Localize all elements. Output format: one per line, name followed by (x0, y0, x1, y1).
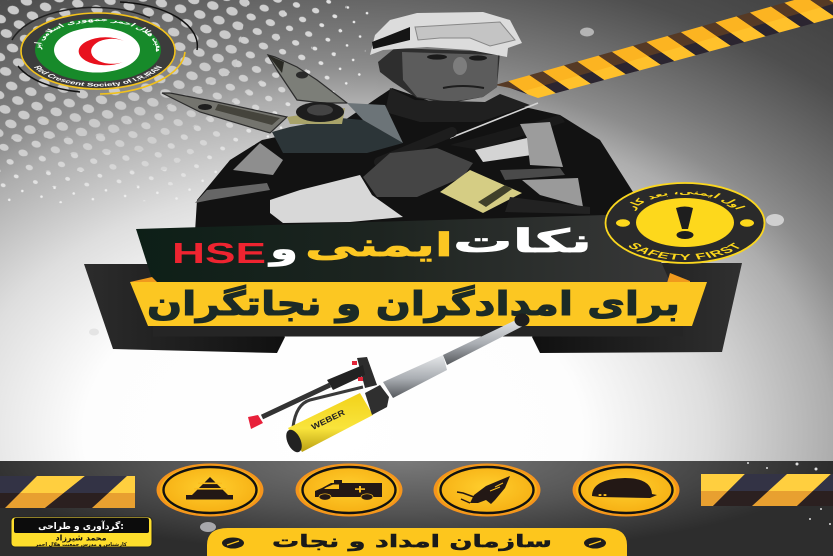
hazard block left (0, 476, 135, 508)
title line one: HSE (172, 238, 266, 270)
rescuer figure with hydraulic cutter (162, 12, 640, 232)
icon: hard hat (572, 464, 680, 516)
title line one (172, 222, 592, 270)
footer title: سازمان امداد و نجات (272, 532, 552, 552)
ram label: WEBER (310, 408, 346, 432)
banner left ribbon tail (84, 264, 285, 353)
banner right ribbon tail (532, 263, 742, 353)
yellow folds (130, 277, 158, 283)
handle and glove (379, 132, 452, 162)
grey dot above footer tab (200, 522, 216, 532)
white cuff (270, 175, 403, 223)
title line one: و (267, 232, 298, 267)
footer bullet left (222, 538, 244, 548)
face (378, 48, 500, 103)
icon: ambulance (296, 464, 402, 516)
decorative grey dots (89, 28, 784, 336)
halftone dot pattern (0, 0, 375, 205)
icon: traffic cone (156, 464, 264, 516)
banner top box (136, 214, 670, 282)
cutter body (272, 118, 403, 153)
safety first badge (604, 182, 766, 264)
footer tab (207, 528, 627, 556)
logo ring text (34, 19, 162, 87)
badge ring text: SAFETY FIRST (628, 242, 740, 260)
cutter lower blade (162, 93, 287, 133)
footer bullet right (584, 538, 606, 548)
collar (385, 88, 530, 122)
helmet (370, 12, 522, 57)
title line two: برای امدادگران و نجاتگران (147, 284, 680, 324)
icon: rescue tool (434, 464, 540, 516)
small stars on band (747, 462, 831, 525)
banner dark body (153, 275, 683, 336)
banner (84, 214, 742, 353)
exclamation mark (676, 206, 694, 239)
hazard tape top right (495, 0, 833, 98)
reflective patches (475, 138, 532, 162)
logo ring text: Red Crescent Society of I.R.IRAN (34, 66, 162, 87)
yellow strip (130, 282, 707, 326)
designer credit box: کارشناس و مدرس جمعیت هلال احمر (34, 542, 127, 548)
badge ring text: اول ایمنی، بعد کار (630, 191, 746, 211)
yellow tool section (440, 170, 522, 213)
logo ring text: جمعیت هلال احمر جمهوری اسلامی ایران (34, 19, 160, 52)
badge ring text (628, 191, 746, 260)
hazard block right (701, 474, 833, 506)
cutter upper blade (268, 55, 347, 103)
red crescent logo (12, 1, 198, 95)
jacket (195, 88, 640, 232)
designer credit box: محمد شیرزاد (55, 534, 107, 542)
designer credit box (11, 517, 152, 548)
designer credit box: گردآوری و طراحی: (38, 520, 124, 532)
title line one: نکات (453, 222, 592, 260)
crescent (79, 37, 124, 65)
bottom band (0, 461, 833, 556)
hydraulic rescue ram (248, 314, 530, 455)
title line one: ایمنی (305, 226, 453, 264)
